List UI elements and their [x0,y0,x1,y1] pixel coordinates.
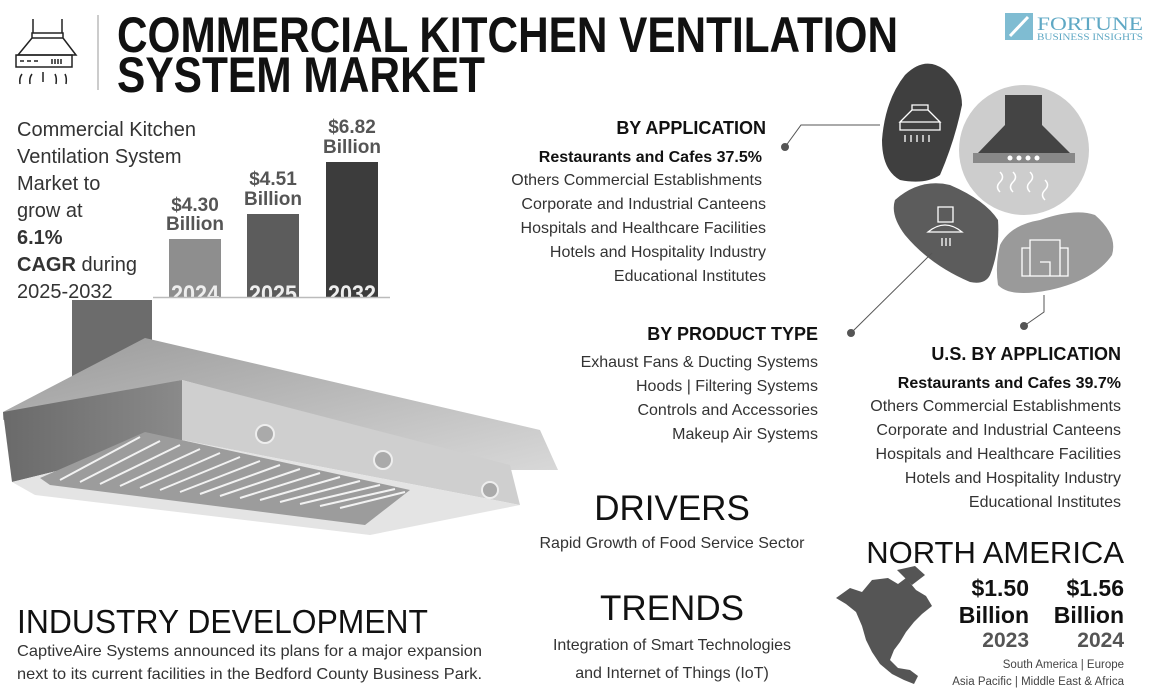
north america stats: 2024 [1077,629,1124,652]
bar chart: Billion [244,189,302,210]
panel: U.S. by application: U.S. BY APPLICATION [931,344,1121,364]
panel: by application: Hospitals and Healthcare Facilities [521,220,766,237]
panel: U.S. by application: Corporate and Industrial Canteens [876,422,1121,439]
title: COMMERCIAL KITCHEN VENTILATION [117,7,898,63]
panel: U.S. by application: Hospitals and Healthcare Facilities [876,446,1121,463]
panel: by product type [581,324,818,443]
panel: by application: Educational Institutes [614,268,766,285]
panel: by application: BY APPLICATION [616,118,766,138]
panel: by application [511,118,766,285]
north america stats: South America | Europe [1003,659,1124,671]
connector lines [782,125,1044,336]
panel: U.S. by application: Educational Institutes [969,494,1121,511]
panel: U.S. by application: Restaurants and Cafes 39.7% [898,375,1121,392]
panel: U.S. by application: Others Commercial Establishments [870,398,1121,415]
north america stats: 2023 [982,629,1029,652]
bar chart: 2024 [171,281,220,308]
bar chart: 2025 [249,281,297,308]
bar chart: 2032 [328,281,376,308]
trends: Integration of Smart Technologies [553,637,791,654]
logo: BUSINESS INSIGHTS [1037,32,1143,42]
drivers: DRIVERS [594,489,750,528]
text: CAGR summary: Market to [17,173,100,195]
bar chart: $6.82 [328,117,376,138]
panel: by application: Hotels and Hospitality Industry [550,244,766,261]
north america stats: $1.56 [1066,575,1124,601]
north america stats: Billion [959,602,1029,628]
text: CAGR summary: 2025-2032 [17,281,113,303]
panel: U.S. by application: Hotels and Hospitality Industry [905,470,1121,487]
panel: U.S. by application [870,344,1121,511]
bar chart: $4.51 [249,169,297,190]
panel: by application: Restaurants and Cafes 37.5% [539,149,762,166]
panel: by product type: Makeup Air Systems [672,426,818,443]
icon: chimney hood [928,207,962,246]
bar chart: Billion [323,137,381,158]
panel: by application: Others Commercial Establishments [511,172,762,189]
drivers [539,489,805,552]
trends: and Internet of Things (IoT) [575,665,769,682]
north america stats: Asia Pacific | Middle East & Africa [952,676,1125,688]
industry development: INDUSTRY DEVELOPMENT [17,603,428,640]
diagram: segment blobs [782,64,1113,337]
panel: by product type: Controls and Accessories [637,402,818,419]
map: north america [836,566,932,684]
text: CAGR summary: 6.1% [17,227,63,249]
panel: by product type: Hoods | Filtering Systems [636,378,818,395]
panel: by application: Corporate and Industrial Canteens [521,196,766,213]
industry development [17,603,482,683]
north america stats: NORTH AMERICA [866,535,1124,570]
logo: FORTUNE [1037,14,1143,35]
drivers: Rapid Growth of Food Service Sector [539,535,805,552]
bar chart: Billion [166,214,224,235]
panel: by product type: BY PRODUCT TYPE [647,324,818,344]
logo [1005,13,1143,42]
north america stats [866,535,1125,688]
image: commercial hood [3,300,558,535]
icon: range hood [16,19,76,84]
icon: hood small [900,105,940,142]
text: CAGR summary: Ventilation System [17,146,182,168]
industry development: CaptiveAire Systems announced its plans for a major expansion [17,643,482,660]
north america stats: Billion [1054,602,1124,628]
bar chart [153,117,390,308]
icon: building [1022,240,1068,276]
text: CAGR summary: Commercial Kitchen [17,119,196,141]
trends: TRENDS [600,589,744,628]
trends [553,589,791,682]
title: SYSTEM MARKET [117,47,485,103]
title [117,7,898,103]
bar chart: $4.30 [171,195,219,216]
text: CAGR summary [17,119,196,303]
text: CAGR summary: CAGR during [17,254,137,276]
panel: by product type: Exhaust Fans & Ducting Systems [581,354,818,371]
text: CAGR summary: grow at [17,200,83,222]
north america stats: $1.50 [971,575,1029,601]
industry development: next to its current facilities in the Bedford County Business Park. [17,666,482,683]
icon: large hood [973,95,1075,200]
